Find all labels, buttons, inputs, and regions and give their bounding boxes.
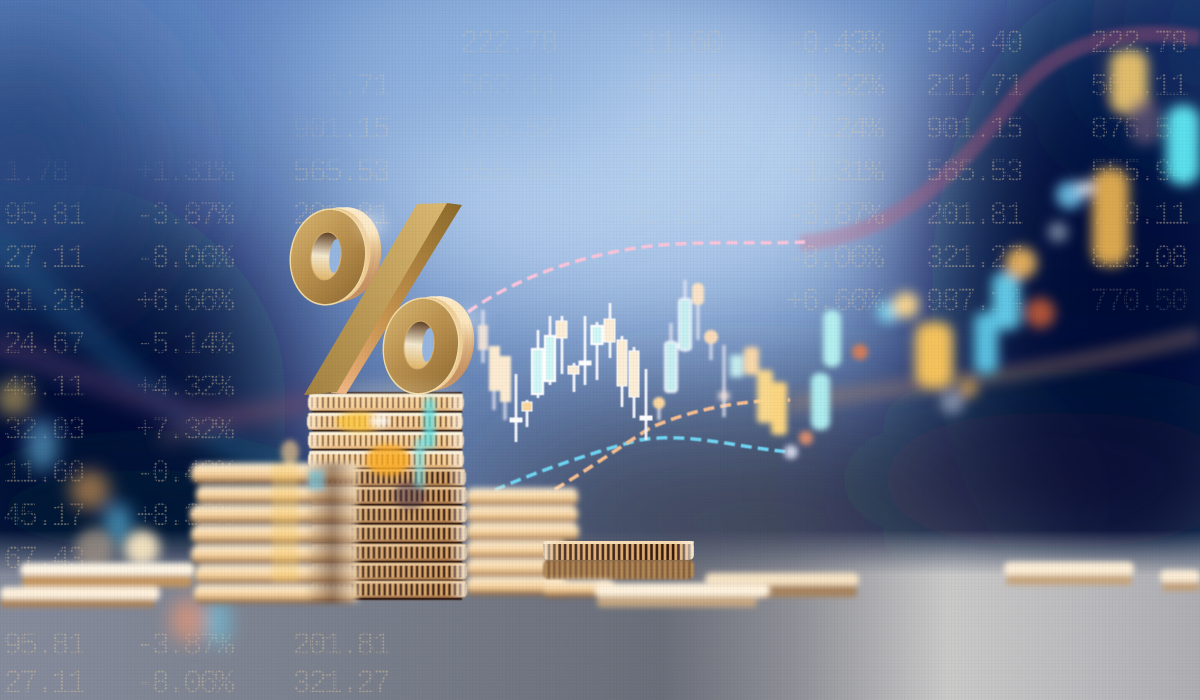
cyan candle bodies bbox=[532, 326, 602, 394]
column 1 numbers: 32.03 bbox=[3, 412, 85, 449]
column 6 numbers: +1.31% bbox=[785, 154, 885, 191]
column 6 numbers: -3.87% bbox=[785, 197, 885, 234]
blurred candles at far right bbox=[877, 50, 1200, 414]
column 2 numbers: +4.32% bbox=[135, 369, 235, 406]
front small coin stack bbox=[543, 541, 694, 597]
column 7 numbers: 201.81 bbox=[925, 197, 1023, 234]
column 8 numbers: 555.94 bbox=[1090, 154, 1188, 191]
column 6 numbers: +6.66% bbox=[785, 283, 885, 320]
column 2 numbers: -3.87% bbox=[135, 197, 235, 234]
column 1 numbers: 1.78 bbox=[3, 154, 69, 191]
column 3 numbers: 201.81 bbox=[292, 197, 390, 234]
column 1 numbers: 48.11 bbox=[3, 369, 85, 406]
column 5 numbers: 95.81 bbox=[625, 197, 707, 234]
column 1 numbers: 95.81 bbox=[3, 197, 85, 234]
table top surface bbox=[0, 530, 1200, 700]
column 4 numbers: 876.52 bbox=[460, 111, 557, 148]
column 8 numbers: 563.11 bbox=[1090, 68, 1188, 105]
column 2 numbers: +8.32% bbox=[135, 498, 235, 535]
column 2 numbers: +1.31% bbox=[135, 154, 235, 191]
candlestick chart: slightly out of focus candles bbox=[478, 280, 724, 420]
column 1 numbers: 95.81 bbox=[3, 627, 85, 664]
column 8 numbers: 770.50 bbox=[1090, 283, 1188, 320]
cream candle bodies bbox=[510, 319, 652, 422]
column 3 numbers: 901.15 bbox=[292, 111, 390, 148]
central sharp coin stack bbox=[307, 392, 467, 600]
column 7 numbers: 987.14 bbox=[925, 283, 1023, 320]
upper coins bbox=[307, 394, 464, 468]
column 6 numbers: +8.32% bbox=[785, 68, 885, 105]
column 1 numbers: 45.17 bbox=[3, 498, 84, 535]
column 5 numbers: -11.60 bbox=[625, 25, 723, 62]
column 5 numbers: -45.17 bbox=[625, 68, 722, 105]
column 8 numbers: 813.08 bbox=[1090, 240, 1188, 277]
right coin stack bbox=[466, 488, 579, 595]
blurred bokeh lights at far left bbox=[0, 380, 132, 547]
column 1 numbers: 27.11 bbox=[3, 240, 85, 277]
column 2 numbers: +7.32% bbox=[135, 412, 235, 449]
column 1 numbers: 67.43 bbox=[3, 541, 85, 578]
blurred flat coins right bbox=[705, 562, 1200, 597]
column 8 numbers: 876.52 bbox=[1090, 111, 1187, 148]
percent sign: lower ring bbox=[377, 291, 480, 399]
dashed blue trend line bbox=[495, 438, 790, 490]
blurred pink trend line right bbox=[800, 34, 1200, 243]
column 2 numbers: -0.43% bbox=[135, 455, 235, 492]
percent sign: slash bbox=[304, 203, 462, 395]
warm glow around percent sign bbox=[335, 214, 479, 397]
column 1 numbers: 11.60 bbox=[3, 455, 85, 492]
column 1 numbers: 24.67 bbox=[3, 326, 84, 363]
candlestick chart: sharp candles bbox=[510, 303, 652, 442]
column 2 numbers: -8.06% bbox=[135, 240, 235, 277]
candlestick chart: blurred candles bbox=[719, 310, 868, 459]
column 7 numbers: 901.15 bbox=[925, 111, 1023, 148]
column 3 numbers: 565.53 bbox=[292, 154, 390, 191]
column 8 numbers: 770.11 bbox=[1090, 197, 1188, 234]
blurred orange trend line right bbox=[790, 335, 1200, 405]
column 6 numbers: -8.06% bbox=[785, 240, 885, 277]
column 3 numbers: 211.71 bbox=[292, 68, 390, 105]
dashed pink trend line bbox=[468, 242, 805, 312]
column 2 numbers: -5.14% bbox=[135, 326, 235, 363]
column 7 numbers: 543.40 bbox=[925, 25, 1023, 62]
column 6 numbers: +7.24% bbox=[785, 111, 885, 148]
left blurred coin stack bbox=[190, 440, 358, 603]
percent sign: upper ring bbox=[284, 202, 387, 310]
column 4 numbers: 555.94 bbox=[460, 154, 558, 191]
lower coins bbox=[310, 469, 467, 598]
column 7 numbers: 565.53 bbox=[925, 154, 1023, 191]
column 8 numbers: 222.78 bbox=[1090, 25, 1188, 62]
column 5 numbers: 23.72 bbox=[625, 154, 706, 191]
blurred purple and blue trend bands left bbox=[0, 235, 320, 470]
column 3 numbers: 201.81 bbox=[292, 627, 390, 664]
column 7 numbers: 321.27 bbox=[925, 240, 1022, 277]
column 2 numbers: -3.87% bbox=[135, 627, 235, 664]
glowing chart reflections on coins bbox=[336, 398, 435, 509]
column 4 numbers: 222.78 bbox=[460, 25, 558, 62]
column 7 numbers: 211.71 bbox=[925, 68, 1023, 105]
column 2 numbers: +6.66% bbox=[135, 283, 235, 320]
column 6 numbers: -0.43% bbox=[785, 25, 885, 62]
dashed orange trend line bbox=[495, 400, 790, 522]
blurred reflection below left stack bbox=[170, 598, 230, 646]
blurred cream coins in background bbox=[75, 528, 160, 568]
column 2 numbers: +7.24% bbox=[135, 111, 235, 148]
column 1 numbers: 81.26 bbox=[3, 283, 85, 320]
blurred flat coins far left bbox=[0, 563, 195, 607]
front blurred flat coin bbox=[595, 583, 770, 607]
column 5 numbers: -67.43 bbox=[625, 111, 723, 148]
column 4 numbers: 563.11 bbox=[460, 68, 558, 105]
